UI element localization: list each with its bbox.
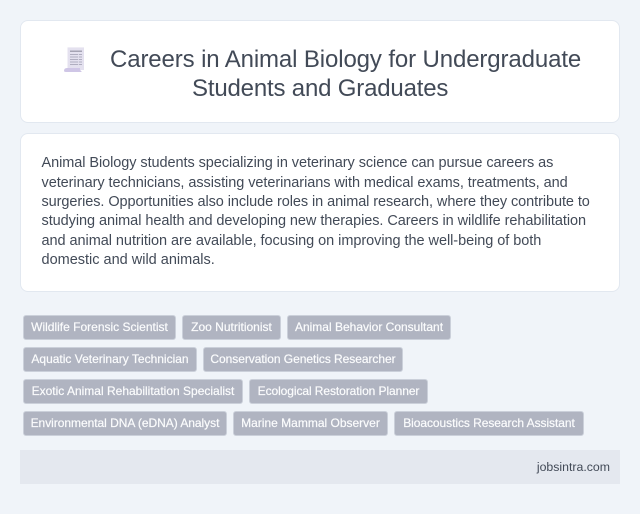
text block: studying animal health and developing new therapies. Careers in wildlife rehabilitation — [42, 213, 586, 229]
panel: title card — [20, 20, 620, 123]
tags: Marine Mammal Observer — [241, 416, 380, 430]
text block: surgeries. Opportunities also include roles in animal research, where they contribute to — [42, 194, 590, 210]
icon: paper scroll — [64, 47, 84, 72]
tags: Aquatic Veterinary Technician — [31, 352, 189, 366]
text block: and animal nutrition are available, focusing on improving the well-being of both — [42, 233, 541, 249]
tags: Wildlife Forensic Scientist — [31, 320, 168, 334]
tags: Conservation Genetics Researcher — [210, 352, 396, 366]
tags: Animal Behavior Consultant — [295, 320, 443, 334]
text block: domestic and wild animals. — [42, 252, 215, 268]
tags: Ecological Restoration Planner — [258, 384, 419, 398]
title: Careers in Animal Biology for Undergraduate — [110, 46, 581, 73]
source credit: jobsintra.com — [537, 460, 610, 474]
footer — [20, 450, 620, 484]
panel: description — [20, 133, 620, 292]
tags: Zoo Nutritionist — [191, 320, 272, 334]
tags: Bioacoustics Research Assistant — [403, 416, 575, 430]
title: Students and Graduates — [192, 75, 448, 102]
text block: Animal Biology students specializing in veterinary science can pursue careers as — [42, 155, 553, 171]
title — [110, 46, 581, 102]
tags — [23, 315, 584, 436]
text block — [42, 155, 590, 268]
tags: Environmental DNA (eDNA) Analyst — [31, 416, 219, 430]
tags: Exotic Animal Rehabilitation Specialist — [32, 384, 234, 398]
text block: veterinary technicians, assisting veterinarians with medical exams, treatments, and — [42, 175, 568, 191]
